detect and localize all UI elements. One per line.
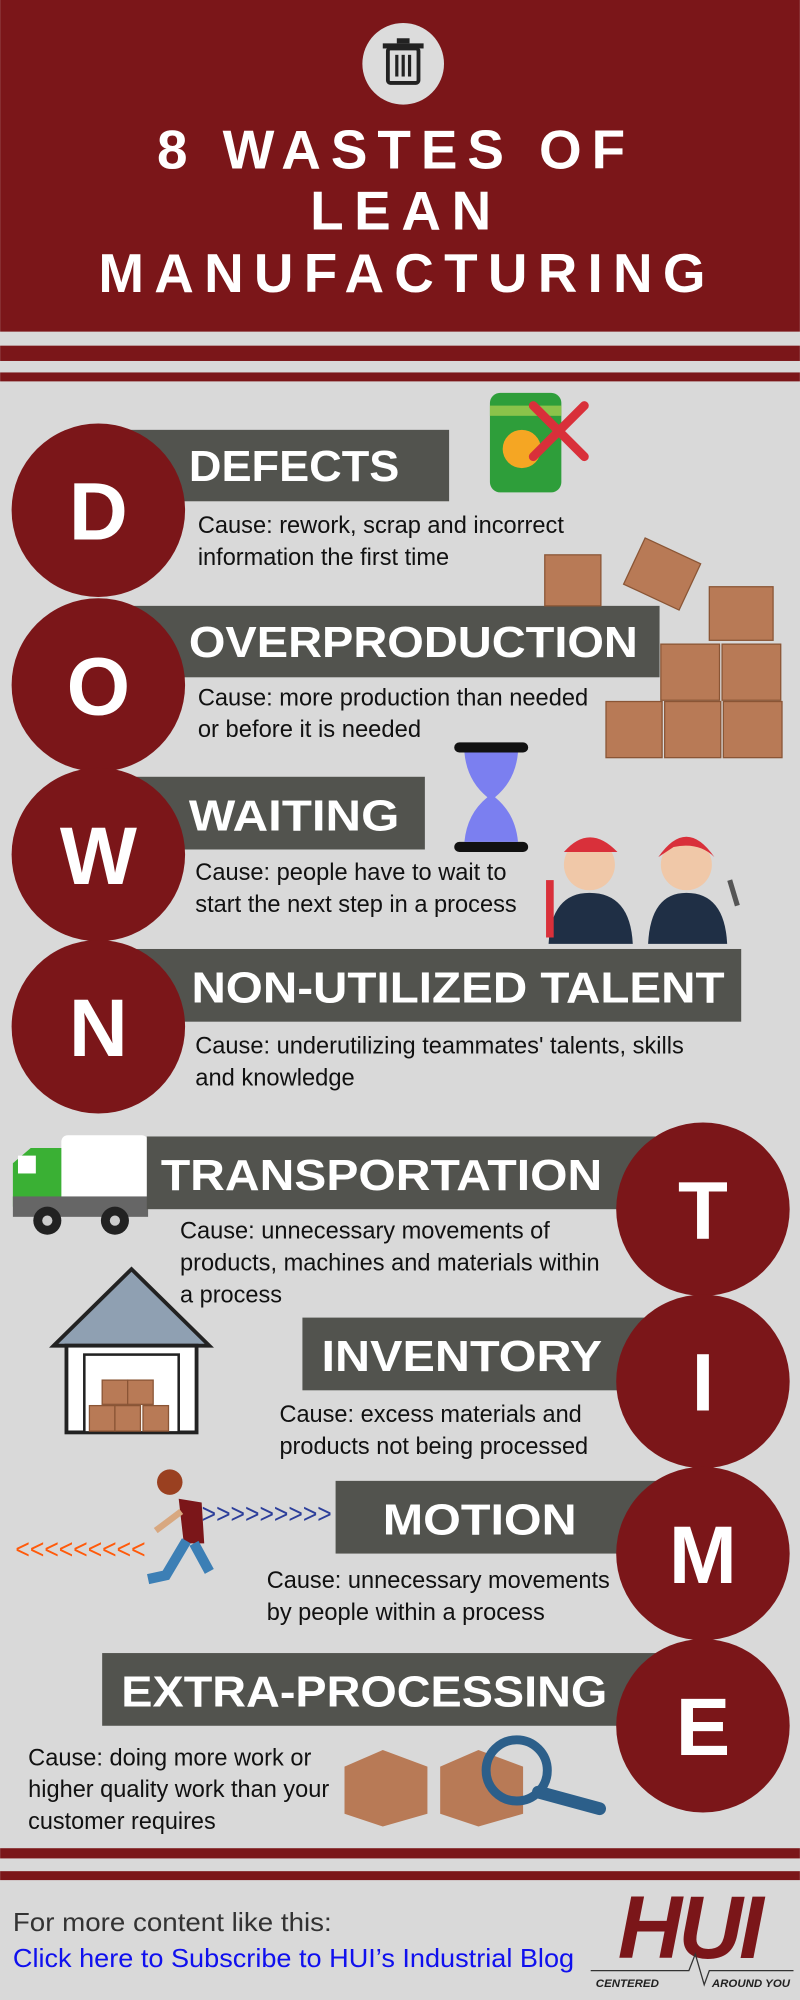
panel: extra-processing: E	[676, 1682, 730, 1773]
panel: motion	[267, 1467, 790, 1640]
icon: running man with arrows	[15, 1469, 332, 1579]
panel: transportation: products, machines and materials within	[180, 1249, 600, 1276]
panel: waiting: W	[60, 811, 137, 902]
icon: running man with arrows: <<<<<<<<<	[15, 1534, 146, 1565]
icon: running man with arrows: >>>>>>>>>	[202, 1498, 332, 1529]
title: LEAN	[310, 180, 491, 242]
icon: boxes	[545, 538, 782, 758]
panel: extra-processing: higher quality work than your	[28, 1776, 329, 1803]
logo: HUI: CENTERED	[596, 1978, 659, 1990]
panel: non-utilized talent: and knowledge	[195, 1064, 355, 1091]
panel: inventory	[279, 1295, 790, 1468]
footer text: Click here to Subscribe to HUI’s Industrial Blog	[13, 1945, 574, 1973]
logo: HUI: HUI	[618, 1877, 766, 1977]
panel: motion: MOTION	[383, 1496, 577, 1544]
panel: waiting: Cause: people have to wait to	[195, 859, 507, 886]
panel: non-utilized talent: N	[69, 983, 128, 1074]
panel: defects: DEFECTS	[189, 443, 399, 491]
panel: non-utilized talent: Cause: underutilizing teammates' talents, skills	[195, 1033, 684, 1060]
panel: waiting	[12, 768, 517, 941]
panel: overproduction: O	[67, 641, 130, 732]
header	[0, 0, 800, 332]
panel: transportation: a process	[180, 1281, 282, 1308]
panel: motion: M	[669, 1510, 737, 1601]
icon: warehouse	[54, 1269, 209, 1432]
panel: transportation: T	[678, 1166, 728, 1257]
footer text: For more content like this:	[13, 1909, 332, 1937]
icon: workers	[546, 837, 737, 944]
panel: waiting: start the next step in a process	[195, 891, 517, 918]
panel: extra-processing: customer requires	[28, 1808, 216, 1835]
panel: motion: by people within a process	[267, 1599, 545, 1626]
footer text	[13, 1909, 574, 1973]
title: 8 WASTES OF	[157, 118, 625, 180]
panel: defects: Cause: rework, scrap and incorrect	[198, 512, 564, 539]
panel: overproduction	[12, 598, 660, 772]
icon: boxes with magnifier	[345, 1740, 600, 1827]
panel: overproduction: Cause: more production than needed	[198, 684, 588, 711]
panel: extra-processing: EXTRA-PROCESSING	[121, 1669, 607, 1717]
panel: non-utilized talent: NON-UTILIZED TALENT	[191, 965, 725, 1013]
panel: waiting: WAITING	[189, 792, 399, 840]
panel: transportation	[147, 1122, 790, 1308]
panel: transportation: Cause: unnecessary movements of	[180, 1218, 550, 1245]
logo: HUI: AROUND YOU	[711, 1978, 791, 1990]
panel: motion: Cause: unnecessary movements	[267, 1567, 610, 1594]
icon: hourglass	[454, 742, 528, 852]
panel: inventory: INVENTORY	[322, 1333, 602, 1381]
title	[98, 118, 705, 304]
icon: truck	[13, 1135, 148, 1235]
panel: extra-processing: Cause: doing more work or	[28, 1744, 311, 1771]
icon: trash can	[362, 23, 444, 105]
title: MANUFACTURING	[98, 242, 705, 304]
icon: can with x	[490, 393, 584, 492]
panel: defects: information the first time	[198, 544, 449, 571]
panel: inventory: Cause: excess materials and	[279, 1401, 582, 1428]
panel: inventory: I	[692, 1338, 714, 1429]
panel: extra-processing	[28, 1639, 790, 1835]
panel: defects: D	[69, 467, 128, 558]
panel: overproduction: or before it is needed	[198, 716, 421, 743]
panel: overproduction: OVERPRODUCTION	[189, 619, 638, 667]
logo: HUI	[591, 1877, 793, 1990]
panel: non-utilized talent	[12, 940, 741, 1114]
panel: transportation: TRANSPORTATION	[161, 1152, 602, 1200]
panel: defects	[12, 423, 564, 597]
panel: inventory: products not being processed	[279, 1433, 588, 1460]
